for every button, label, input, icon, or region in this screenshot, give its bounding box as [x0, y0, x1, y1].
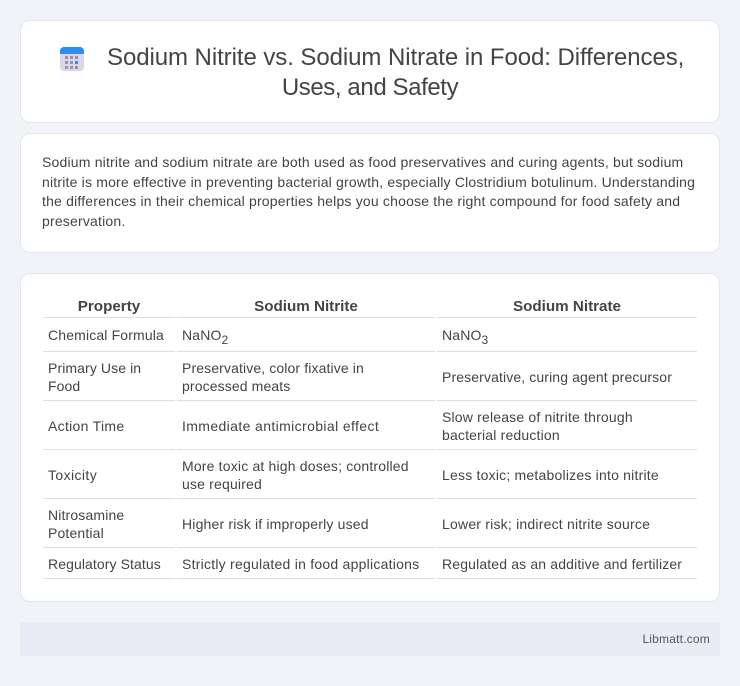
row: action time: Slow release of nitrite through	[442, 409, 633, 425]
footer text: Libmatt.com	[642, 632, 710, 646]
row: nitrosamine potential	[48, 507, 650, 541]
panel: comparison table	[20, 273, 720, 602]
title	[107, 44, 684, 101]
row: primary use: processed meats	[182, 378, 290, 394]
intro text: the differences in their chemical properties helps you choose the right compound for food safety and	[42, 193, 680, 209]
row: chemical formula: Chemical Formula	[48, 327, 164, 343]
row: primary use: Preservative, color fixative in	[182, 360, 364, 376]
row: primary use: Preservative, curing agent precursor	[442, 369, 672, 385]
row: toxicity: More toxic at high doses; controlled	[182, 458, 409, 474]
row: primary use	[48, 360, 672, 394]
panel: title card	[20, 20, 720, 123]
icon: calendar	[60, 47, 84, 71]
intro text: Sodium nitrite and sodium nitrate are both used as food preservatives and curing agents, but sodium	[42, 154, 683, 170]
row: regulatory status	[48, 556, 682, 572]
row: nitrosamine potential: Lower risk; indirect nitrite source	[442, 516, 650, 532]
row: action time: Action Time	[48, 418, 124, 434]
row: toxicity	[48, 458, 659, 492]
row: regulatory status: Regulated as an additive and fertilizer	[442, 556, 682, 572]
intro text: preservation.	[42, 213, 125, 229]
row: action time	[48, 409, 633, 443]
row: chemical formula: NaNO3	[442, 327, 488, 347]
title: Sodium Nitrite vs. Sodium Nitrate in Food: Differences,	[107, 44, 684, 71]
row: toxicity: use required	[182, 476, 262, 492]
table header: Sodium Nitrate	[513, 298, 621, 315]
row: chemical formula	[48, 327, 488, 347]
row: toxicity: Less toxic; metabolizes into nitrite	[442, 467, 659, 483]
table header: Property	[78, 298, 140, 315]
table header: Sodium Nitrite	[254, 298, 358, 315]
row: nitrosamine potential: Nitrosamine	[48, 507, 124, 523]
row: action time: Immediate antimicrobial effect	[182, 418, 379, 434]
panel: introduction	[20, 133, 720, 253]
row: primary use: Food	[48, 378, 80, 394]
intro text: nitrite is more effective in preventing bacterial growth, especially Clostridium botulinum. Understanding	[42, 174, 695, 190]
row: toxicity: Toxicity	[48, 467, 97, 483]
footer	[20, 622, 720, 656]
row: regulatory status: Regulatory Status	[48, 556, 161, 572]
row: nitrosamine potential: Higher risk if improperly used	[182, 516, 369, 532]
table header	[78, 298, 621, 315]
row: chemical formula: NaNO2	[182, 327, 228, 347]
row: action time: bacterial reduction	[442, 427, 560, 443]
title: Uses, and Safety	[282, 74, 458, 101]
row: regulatory status: Strictly regulated in food applications	[182, 556, 419, 572]
row: nitrosamine potential: Potential	[48, 525, 104, 541]
row: primary use: Primary Use in	[48, 360, 141, 376]
intro text	[42, 154, 695, 229]
